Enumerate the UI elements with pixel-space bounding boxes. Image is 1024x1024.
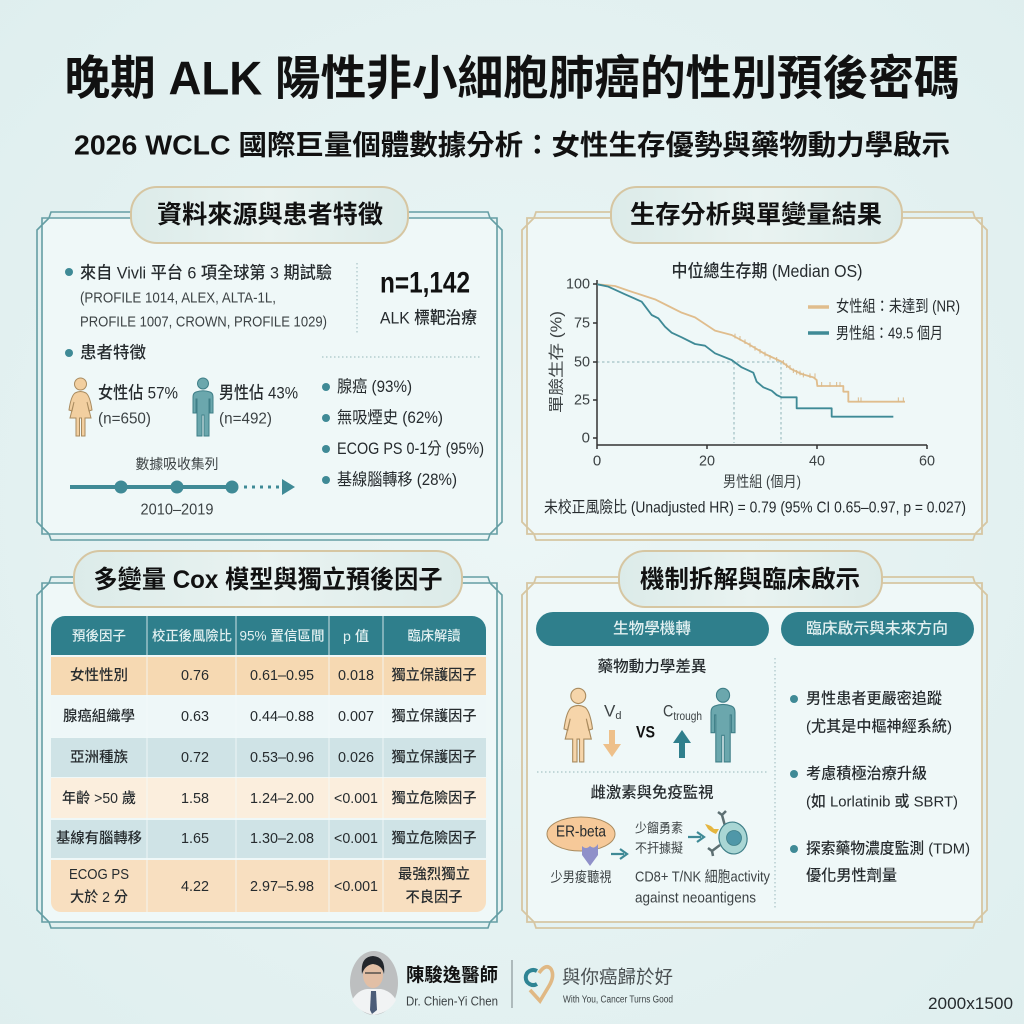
row: baseline brain metastasis: 1.65 xyxy=(181,831,209,847)
legend: 男性組：49.5 個月 xyxy=(836,324,943,342)
row: baseline brain metastasis xyxy=(51,820,486,858)
axis labels: 100 xyxy=(566,276,590,292)
heading pill: 機制拆解與臨床啟示 xyxy=(640,566,860,594)
brand name xyxy=(562,966,673,1006)
row: adenocarcinoma: 獨立保護因子 xyxy=(392,707,476,725)
row: age over 50 xyxy=(51,778,486,818)
trough concentration xyxy=(663,702,702,758)
hazard ratio note: 未校正風險比 (Unadjusted HR) = 0.79 (95% CI 0.65–0.97, p = 0.027) xyxy=(544,498,966,516)
female share: 女性佔 57% xyxy=(98,382,178,402)
axis labels xyxy=(566,276,935,490)
implication: treatment escalation: (如 Lorlatinib 或 SBRT) xyxy=(806,794,958,810)
row: Asian race: 0.53–0.96 xyxy=(250,750,314,766)
sub-header: biology xyxy=(536,612,769,646)
row: female sex: 0.018 xyxy=(338,668,374,684)
row: age over 50: <0.001 xyxy=(334,791,378,807)
brand name: 與你癌歸於好 xyxy=(562,966,673,988)
axis labels: 0 xyxy=(593,452,601,470)
trial source text: 來自 Vivli 平台 6 項全球第 3 期試驗 xyxy=(80,262,332,282)
row: female sex: 獨立保護因子 xyxy=(392,666,476,684)
heading pill xyxy=(74,551,462,607)
author photo xyxy=(350,951,398,1015)
row: adenocarcinoma xyxy=(51,697,486,737)
CD8 activity text: against neoantigens xyxy=(635,890,756,906)
row: ECOG PS 2 or higher: <0.001 xyxy=(334,879,378,895)
chart title: 中位總生存期 (Median OS) xyxy=(672,261,862,281)
size caption: 2000x1500 xyxy=(928,995,1013,1013)
axis labels: 60 xyxy=(919,452,935,470)
row: Asian race: 0.026 xyxy=(338,750,374,766)
row: female sex: 女性性別 xyxy=(70,666,128,684)
row: baseline brain metastasis: 基線有腦轉移 xyxy=(56,830,142,847)
footer: author and brand xyxy=(350,951,673,1015)
pharmacokinetics heading: 藥物動力學差異 xyxy=(598,658,706,676)
row: female sex: 0.76 xyxy=(181,668,209,684)
row: adenocarcinoma: 0.44–0.88 xyxy=(250,709,314,725)
row: ECOG PS 2 or higher: 不良因子 xyxy=(406,888,462,906)
author name: 陳駿逸醫師 xyxy=(406,964,498,986)
row: adenocarcinoma: 0.007 xyxy=(338,709,374,725)
heading pill: 資料來源與患者特徵 xyxy=(157,201,383,229)
heading pill: 多變量 Cox 模型與獨立預後因子 xyxy=(94,566,442,594)
author name: Dr. Chien-Yi Chen xyxy=(406,994,498,1008)
trough concentration: C xyxy=(663,702,675,720)
versus label: VS xyxy=(636,722,655,742)
panel frame xyxy=(37,212,502,540)
female share xyxy=(98,382,178,428)
implication: treatment escalation xyxy=(790,766,958,810)
row: ECOG PS 2 or higher: 4.22 xyxy=(181,879,209,895)
CD8 activity text: CD8+ T/NK 細胞activity xyxy=(635,868,770,886)
panel: data sources and patient characteristics xyxy=(37,187,502,540)
immune signal text: 少餾勇素 xyxy=(635,820,683,836)
brand name: With You, Cancer Turns Good xyxy=(563,994,673,1006)
baseline characteristics list: ECOG PS 0-1分 (95%) xyxy=(337,439,484,458)
enrollment timeline: 2010–2019 xyxy=(140,502,214,518)
volume of distribution xyxy=(603,702,621,757)
table header xyxy=(51,616,486,655)
sub-header: clinical implications: 臨床啟示與未來方向 xyxy=(806,618,948,638)
icon: woman xyxy=(564,688,593,762)
table header: 95% 置信區間 xyxy=(240,628,324,644)
implication: closer follow-up: 男性患者更嚴密追蹤 xyxy=(806,690,942,708)
axis labels: 75 xyxy=(574,314,590,332)
legend: 女性組：未達到 (NR) xyxy=(836,296,960,316)
row: baseline brain metastasis: 獨立危險因子 xyxy=(392,829,476,847)
table header: p 值 xyxy=(343,628,369,644)
row: ECOG PS 2 or higher: ECOG PS xyxy=(69,867,129,883)
heading pill xyxy=(611,187,902,243)
row: female sex xyxy=(51,657,486,695)
icon: man xyxy=(711,688,735,762)
panel: multivariable Cox model xyxy=(37,551,502,928)
axis labels: 25 xyxy=(574,392,590,408)
panel: mechanisms and clinical implications xyxy=(522,551,987,928)
female share: (n=650) xyxy=(98,410,151,428)
axis labels: 0 xyxy=(582,430,590,446)
row: age over 50: 1.24–2.00 xyxy=(250,791,314,807)
author name xyxy=(406,964,498,1008)
implication: treatment escalation: 考慮積極治療升級 xyxy=(806,766,927,782)
immune signal text: 不扞據擬 xyxy=(635,840,683,856)
ER-beta diagram xyxy=(547,817,615,885)
median guide lines xyxy=(597,362,781,443)
enrollment timeline xyxy=(70,456,295,518)
CD8 activity text xyxy=(635,868,770,906)
sample size callout xyxy=(357,263,477,335)
row: Asian race: 獨立保護因子 xyxy=(392,748,476,766)
table: prognostic factors xyxy=(51,616,486,912)
row: age over 50: 年齡 >50 歲 xyxy=(62,789,136,807)
implication: closer follow-up xyxy=(790,690,952,736)
patient characteristics heading: 患者特徵 xyxy=(80,343,146,362)
heading pill xyxy=(131,187,408,243)
row: Asian race: 0.72 xyxy=(181,750,209,766)
ER-beta diagram: ER-beta xyxy=(556,824,606,840)
row: baseline brain metastasis: 1.30–2.08 xyxy=(250,831,314,847)
arrow: to T cell signal xyxy=(611,849,627,859)
row: ECOG PS 2 or higher: 最強烈獨立 xyxy=(398,865,470,883)
icon: man xyxy=(193,378,213,436)
volume of distribution: d xyxy=(615,710,621,722)
table header: 預後因子 xyxy=(72,628,126,644)
trial source text: PROFILE 1007, CROWN, PROFILE 1029) xyxy=(80,314,327,330)
implication: closer follow-up: (尤其是中樞神經系統) xyxy=(806,718,952,736)
y axis title: 單臉生存 (%) xyxy=(548,311,566,413)
axis labels: 40 xyxy=(809,452,825,470)
male share: 男性佔 43% xyxy=(219,384,298,402)
axes xyxy=(593,280,927,449)
axis labels: 男性組 (個月) xyxy=(723,474,801,490)
icon: immune cell xyxy=(705,811,750,857)
panel: survival analysis xyxy=(522,187,987,540)
row: female sex: 0.61–0.95 xyxy=(250,668,314,684)
male share: (n=492) xyxy=(219,410,272,428)
heading pill xyxy=(619,551,882,607)
row: Asian race xyxy=(51,738,486,777)
row: Asian race: 亞洲種族 xyxy=(70,749,128,766)
row: age over 50: 獨立危險因子 xyxy=(392,789,476,807)
table header: 校正後風險比 xyxy=(152,628,232,644)
arrow: to immune cell xyxy=(688,832,704,842)
sub-header: biology: 生物學機轉 xyxy=(613,620,691,638)
heading pill: 生存分析與單變量結果 xyxy=(630,201,882,229)
male share xyxy=(219,384,298,428)
enrollment timeline: 數據吸收集列 xyxy=(136,456,218,472)
logo mark xyxy=(526,967,553,1001)
row: age over 50: 1.58 xyxy=(181,791,209,807)
table header: 臨床解讀 xyxy=(408,628,461,644)
sample size callout: ALK 標靶治療 xyxy=(380,308,477,328)
baseline characteristics list: 基線腦轉移 (28%) xyxy=(337,470,457,489)
axis labels: 20 xyxy=(699,452,715,470)
implication: drug monitoring: 探索藥物濃度監測 (TDM) xyxy=(806,840,970,858)
axis labels: 50 xyxy=(574,354,590,370)
trial source text: (PROFILE 1014, ALEX, ALTA-1L, xyxy=(80,290,276,306)
row: adenocarcinoma: 0.63 xyxy=(181,709,209,725)
subtitle: 2026 WCLC 國際巨量個體數據分析：女性生存優勢與藥物動力學啟示 xyxy=(74,130,950,160)
immune signal text xyxy=(635,820,683,856)
baseline characteristics list: 無吸煙史 (62%) xyxy=(337,408,443,427)
row: ECOG PS 2 or higher: 2.97–5.98 xyxy=(250,879,314,895)
panel frame xyxy=(37,577,502,928)
implication: drug monitoring xyxy=(790,840,970,884)
panel frame xyxy=(522,577,987,928)
title: 晚期 ALK 陽性非小細胞肺癌的性別預後密碼 xyxy=(64,52,960,104)
sample size callout: n=1,142 xyxy=(380,266,470,300)
implication: drug monitoring: 優化男性劑量 xyxy=(806,868,897,884)
legend xyxy=(808,296,960,342)
survival chart xyxy=(548,276,960,490)
row: baseline brain metastasis: <0.001 xyxy=(334,831,378,847)
row: ECOG PS 2 or higher: 大於 2 分 xyxy=(70,889,128,906)
hormone and immune surveillance heading: 雌激素與免疫監視 xyxy=(590,782,714,802)
row: ECOG PS 2 or higher xyxy=(51,860,486,912)
baseline characteristics list: 腺癌 (93%) xyxy=(337,377,412,396)
baseline characteristics list xyxy=(322,357,484,489)
ER-beta diagram: 少男痠聽視 xyxy=(550,869,612,885)
survival curves xyxy=(597,284,905,417)
sub-header: clinical implications xyxy=(781,612,974,646)
trough concentration: trough xyxy=(673,709,702,723)
row: adenocarcinoma: 腺癌組織學 xyxy=(63,707,135,725)
icon: woman xyxy=(69,378,92,436)
volume of distribution: V xyxy=(604,702,615,720)
panel frame xyxy=(522,212,987,540)
trial source text xyxy=(65,262,332,330)
